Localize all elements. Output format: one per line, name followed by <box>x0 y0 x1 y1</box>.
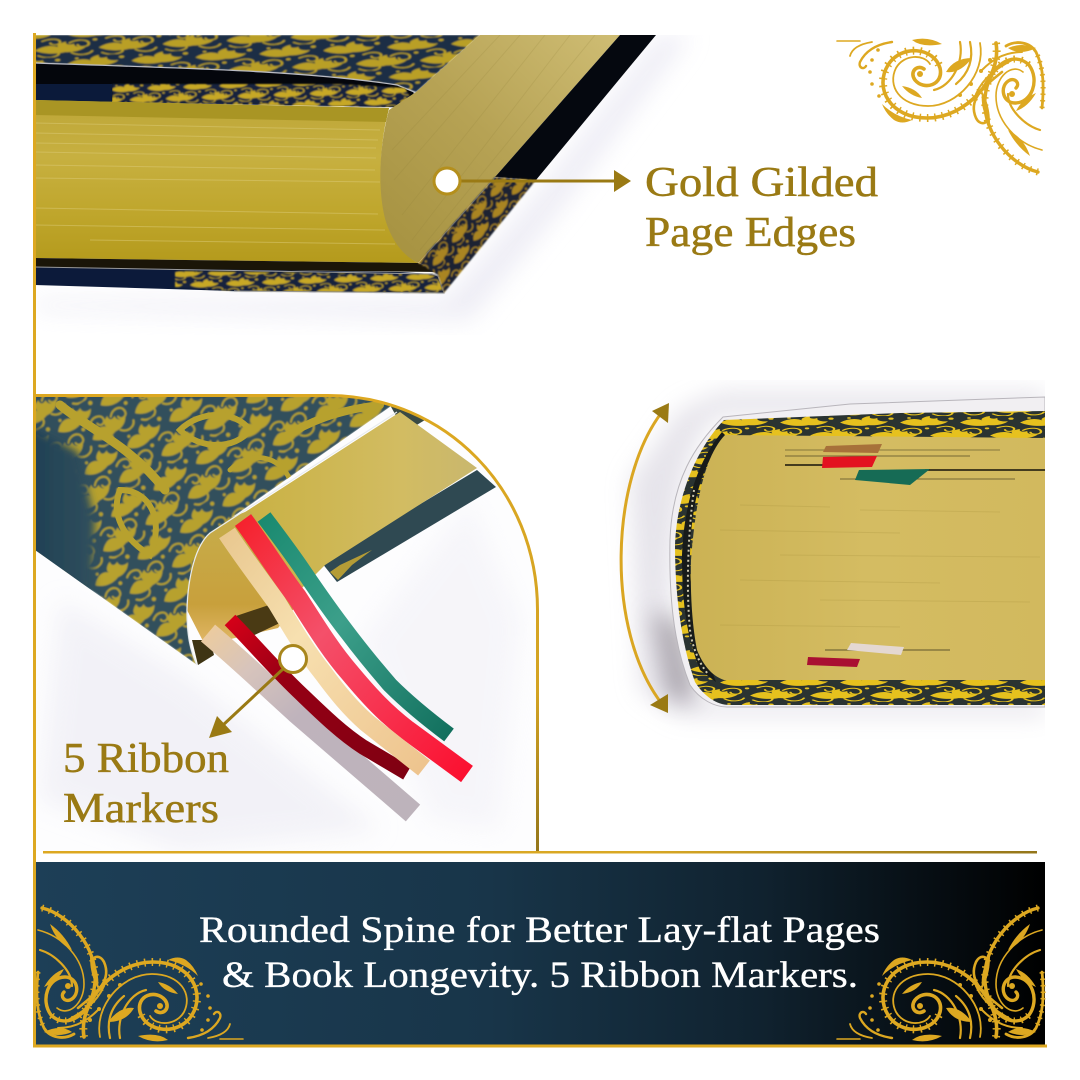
ribbon stub brown <box>823 444 882 453</box>
cast shadow lower left <box>652 610 695 700</box>
tail ornament <box>192 640 214 665</box>
lower cover strip <box>35 267 444 293</box>
heading: gold gilded page edges: Gold Gilded <box>645 160 878 206</box>
cover inner edge highlight <box>187 412 397 665</box>
lower strip pattern <box>175 271 444 293</box>
board pattern edge <box>418 177 536 293</box>
banner text: & Book Longevity. 5 Ribbon Markers. <box>222 955 858 996</box>
patterned cover border <box>675 411 1045 705</box>
ribbon stub green <box>855 469 930 485</box>
ornament: banner bottom right <box>837 908 1043 1041</box>
heading: 5 ribbon markers: Markers <box>63 786 219 832</box>
ribbon red <box>243 520 467 774</box>
banner text <box>199 910 880 996</box>
page gaps <box>785 450 1045 650</box>
gold page top <box>691 435 1045 680</box>
banner text: Rounded Spine for Better Lay-flat Pages <box>199 910 880 951</box>
page block top band <box>35 100 389 122</box>
headband ornament <box>236 606 278 635</box>
dark under-board <box>322 470 496 582</box>
page lines <box>35 123 395 244</box>
photo: book with five ribbons in arched panel <box>25 395 540 851</box>
cover <box>25 395 407 665</box>
top cover pattern <box>35 35 480 92</box>
curved arrow: spine curvature <box>621 403 669 713</box>
divider above banner <box>43 851 1037 854</box>
ribbon green <box>264 517 449 735</box>
top dark trim <box>390 406 424 424</box>
gold page block <box>35 100 418 263</box>
fore edge <box>380 35 620 263</box>
ribbon stub dark red <box>807 657 860 667</box>
headband stitching <box>688 490 708 674</box>
ribbon cream <box>227 533 424 768</box>
heading: gold gilded page edges <box>645 160 878 256</box>
photo: book corner with gilded edges <box>35 35 690 320</box>
lower strip edge <box>35 267 444 293</box>
heading: 5 ribbon markers <box>63 736 229 832</box>
fore edge page lines <box>464 35 595 128</box>
cover shadow band <box>35 63 416 107</box>
black board edge <box>495 35 656 180</box>
gold block side <box>225 412 477 590</box>
pointer: ribbon markers <box>209 646 306 738</box>
ribbon stub white <box>847 643 904 655</box>
spine dark band <box>682 432 726 682</box>
under-board gold trim <box>330 550 372 580</box>
spine outline <box>670 397 1045 707</box>
pointer: gilded edges <box>434 168 631 194</box>
inner strip navy end <box>35 84 112 103</box>
ribbon maroon <box>230 620 407 773</box>
cover shadow below block <box>35 258 440 272</box>
inner gold pages <box>188 512 293 640</box>
ribbon gray <box>208 633 413 813</box>
ribbon stub red <box>822 456 877 468</box>
callout arch frame <box>35 396 538 851</box>
ornament: top right flourish <box>837 39 1043 172</box>
cover navy side <box>36 422 101 595</box>
gold grain <box>720 505 1040 627</box>
inner cover strip <box>112 84 416 107</box>
cover top edge highlight <box>36 62 415 94</box>
arrowhead top <box>652 403 669 423</box>
ornament: banner bottom left <box>37 908 243 1041</box>
banner <box>35 862 1045 1045</box>
heading: gold gilded page edges: Page Edges <box>645 210 856 256</box>
cover medallion <box>60 405 380 555</box>
arrowhead bottom <box>650 694 668 713</box>
heading: 5 ribbon markers: 5 Ribbon <box>63 736 229 782</box>
cover pattern <box>35 395 407 665</box>
photo: rounded spine view from head <box>630 392 1045 716</box>
